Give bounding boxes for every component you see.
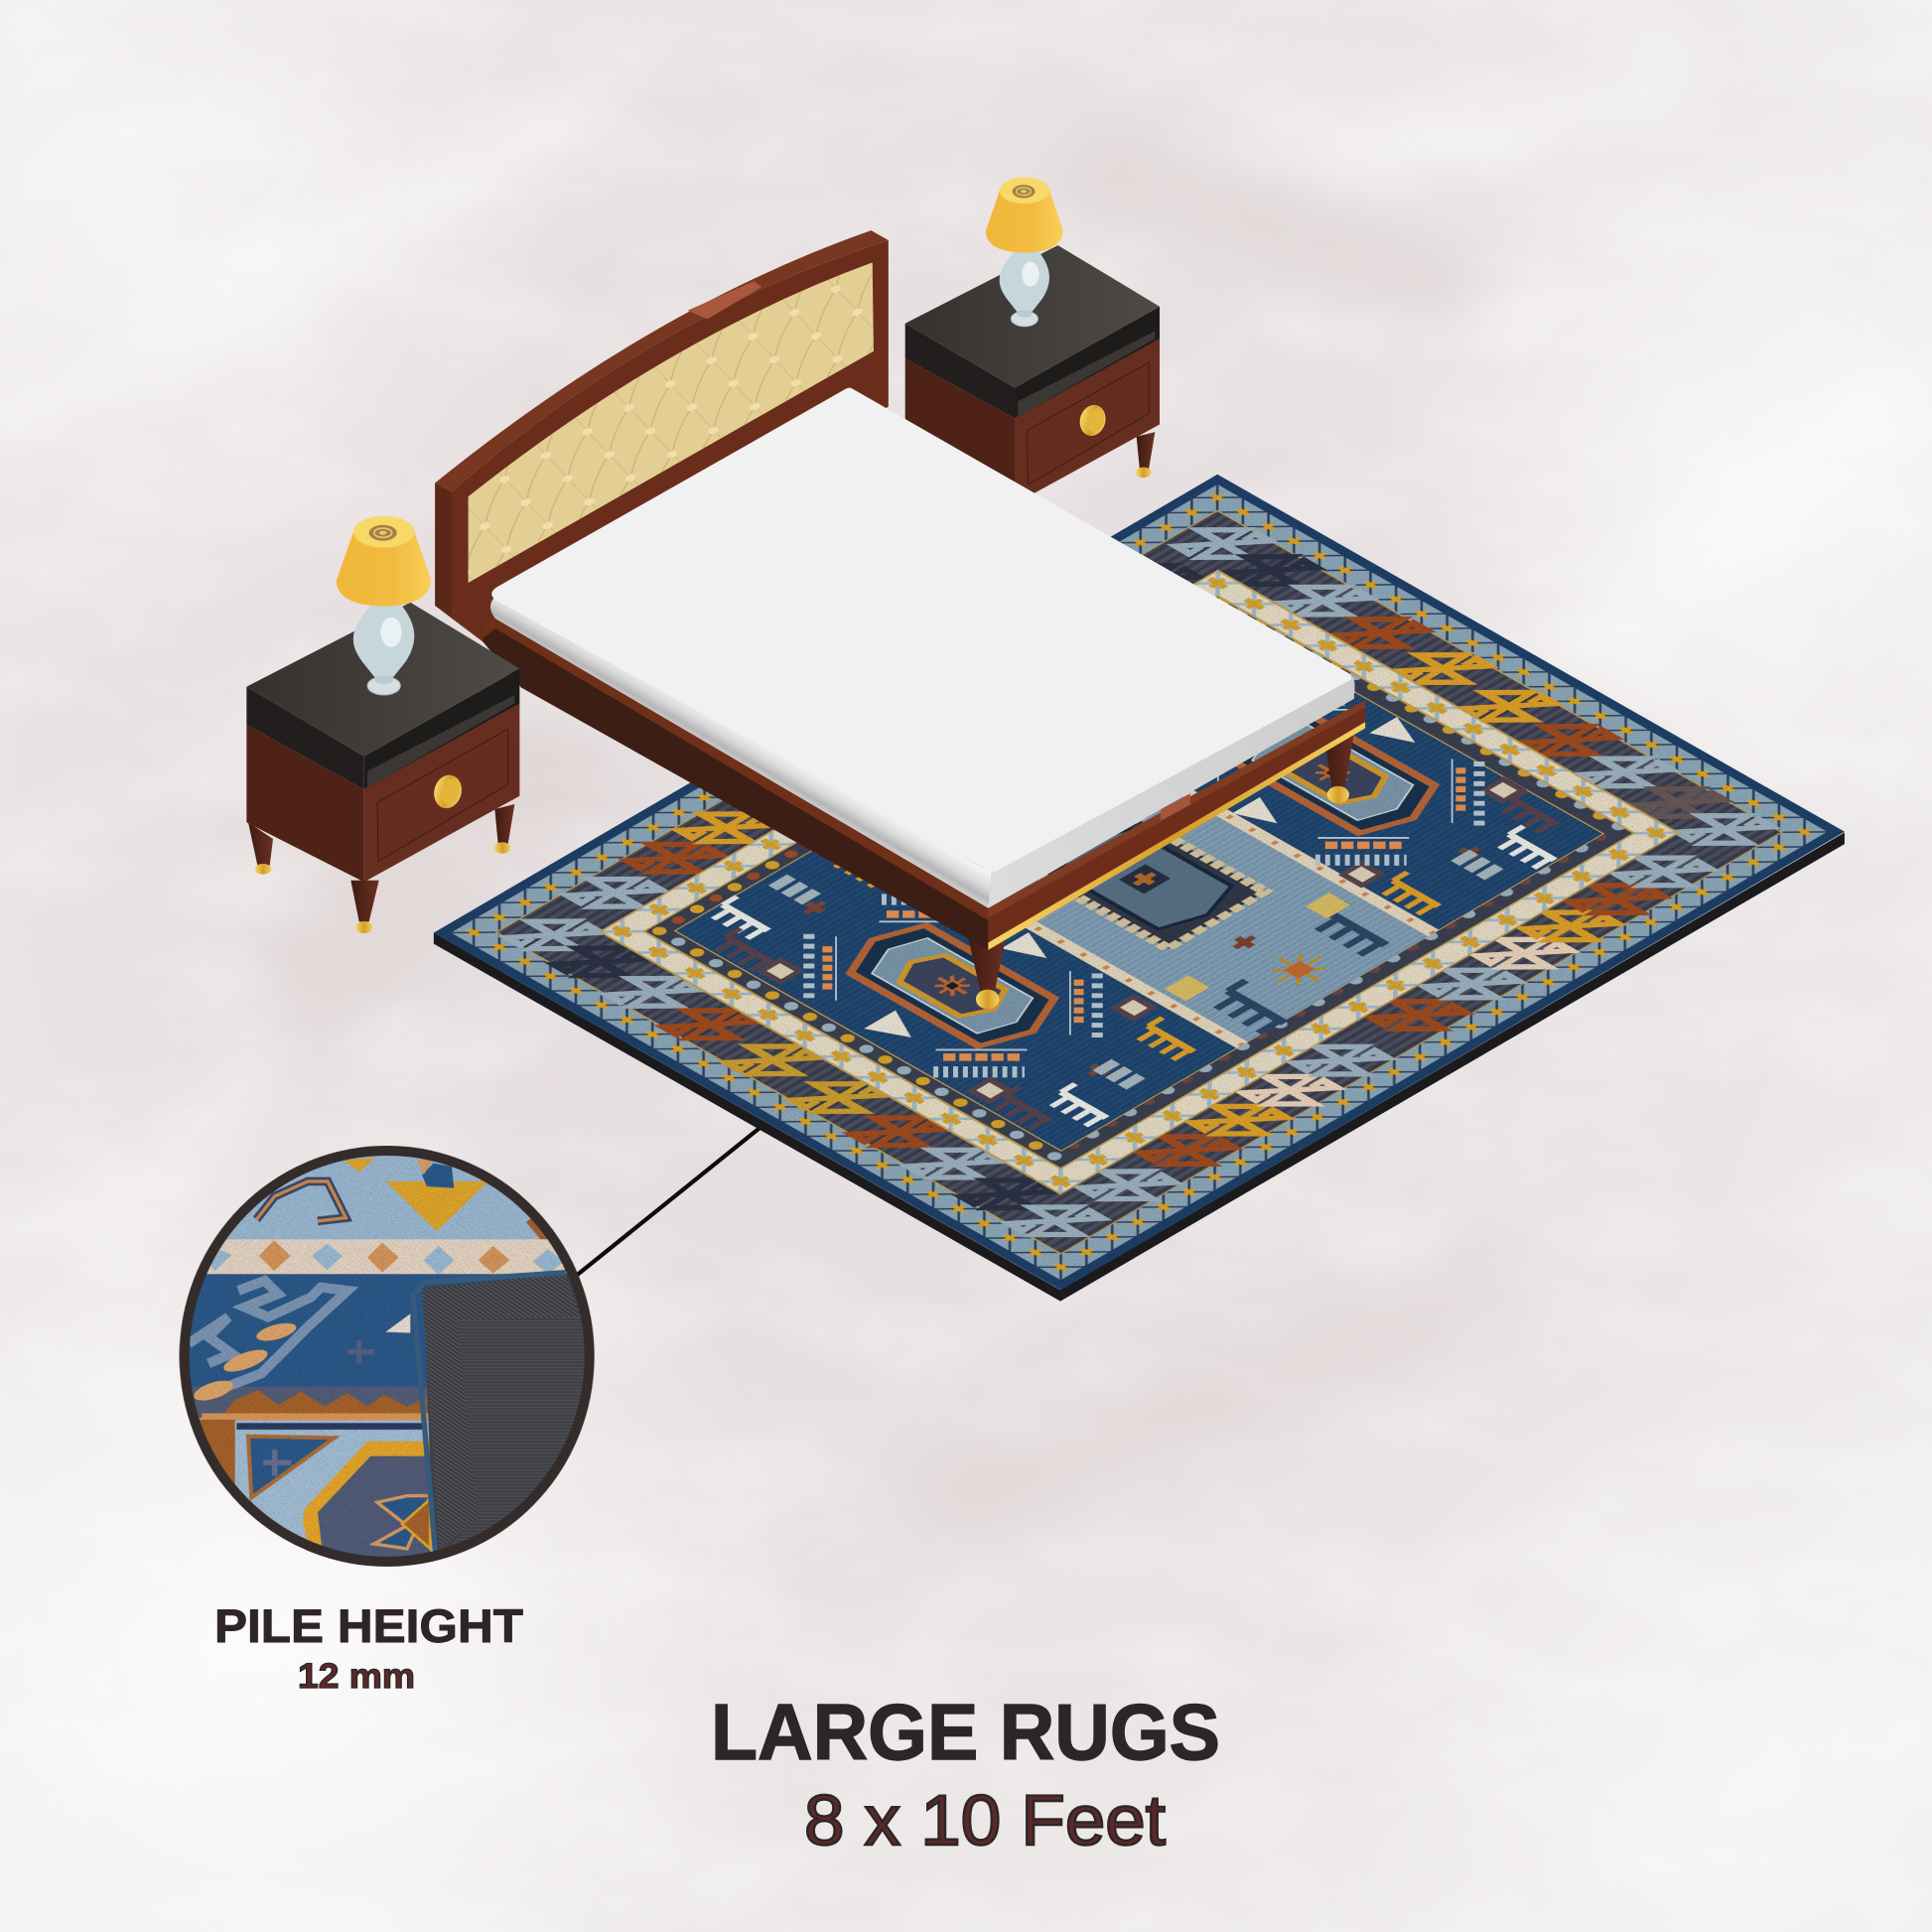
cushion — [469, 262, 874, 583]
field ornaments — [680, 616, 1600, 1148]
inset: cream band — [207, 1239, 567, 1275]
inset: hook ornament — [256, 1181, 546, 1239]
inset: zigzag band — [182, 1387, 434, 1423]
label: pile height: PILE HEIGHT — [214, 1599, 523, 1652]
inset: top gold triangle — [385, 1181, 488, 1231]
inset ring — [185, 1151, 590, 1562]
headboard top edge — [435, 230, 889, 491]
inset: lower panel — [199, 1418, 433, 1552]
bed legs — [969, 733, 1354, 1009]
bed frame — [483, 617, 1365, 950]
illustration scaled group — [182, 178, 1845, 1574]
central light panel — [848, 709, 1442, 1049]
rug surface pattern — [434, 475, 1845, 1290]
inset: peach leaves — [194, 1322, 296, 1401]
medallion flank ornaments — [809, 688, 1479, 1072]
inset: gold outline with grey field — [303, 1442, 430, 1569]
bed — [483, 388, 1365, 1009]
inset: blue field — [189, 1274, 510, 1387]
rug — [434, 475, 1845, 1302]
headboard highlight — [688, 281, 761, 319]
nightstand right — [905, 245, 1160, 551]
rug edge thickness — [434, 832, 1845, 1302]
subtitle: 8 x 10 Feet — [804, 1782, 1166, 1861]
inset: folded backing corner — [413, 1271, 599, 1562]
headboard — [435, 230, 889, 642]
lamp left — [337, 516, 431, 695]
label: 12 mm: 12 mm — [298, 1657, 415, 1696]
inset: grey hook ornament — [189, 1281, 347, 1397]
headboard side — [435, 483, 483, 642]
title: LARGE RUGS — [711, 1688, 1220, 1776]
lamp right — [986, 178, 1063, 327]
headboard face — [452, 240, 889, 642]
callout line — [577, 1128, 760, 1276]
medallion lower — [833, 917, 1072, 1054]
inset: light blue band — [226, 1156, 548, 1240]
field — [675, 614, 1603, 1151]
border motifs — [499, 512, 1779, 1252]
mattress — [490, 388, 1354, 908]
circle inset: pile close-up — [182, 1149, 599, 1574]
medallion upper — [1213, 704, 1452, 841]
nightstand left — [246, 603, 519, 933]
